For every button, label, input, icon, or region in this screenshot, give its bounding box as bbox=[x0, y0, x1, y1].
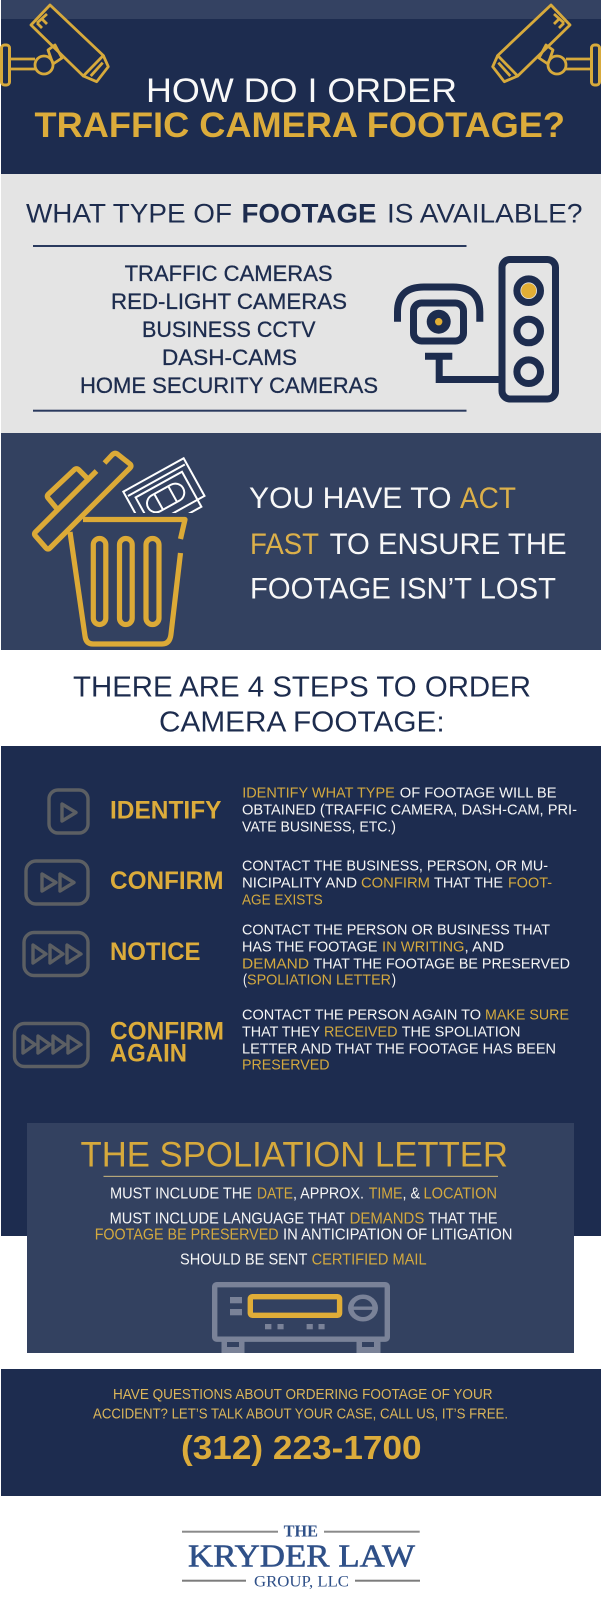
heading: four steps: THERE ARE 4 STEPS TO ORDER bbox=[73, 672, 531, 704]
panel: steps bbox=[1, 746, 601, 1236]
list of camera types bbox=[80, 261, 378, 398]
step description: confirm again: PRESERVED bbox=[242, 1056, 330, 1073]
list of camera types: HOME SECURITY CAMERAS bbox=[80, 373, 378, 398]
callout: act fast text bbox=[249, 482, 567, 606]
text: language that demands preservation: MUST INCLUDE LANGUAGE THAT bbox=[110, 1210, 345, 1227]
callout: act fast text: YOU HAVE TO bbox=[249, 482, 452, 515]
heading: the spoliation letter: THE SPOLIATION LETTER bbox=[80, 1136, 508, 1175]
panel: spoliation letter bbox=[27, 1123, 574, 1353]
icon: right security camera bbox=[493, 5, 600, 85]
text: date time location: MUST INCLUDE THE bbox=[110, 1185, 252, 1202]
step description: notice: ) bbox=[392, 971, 396, 988]
text: date time location: DATE bbox=[257, 1185, 293, 1202]
step description: identify: VATE BUSINESS, ETC.) bbox=[242, 818, 396, 835]
text: language that demands preservation: DEMANDS bbox=[350, 1210, 424, 1227]
panel: call to action footer bbox=[1, 1369, 601, 1496]
text: date time location: , APPROX. bbox=[293, 1185, 364, 1202]
text: date time location: TIME bbox=[369, 1185, 402, 1202]
step label: confirm: CONFIRM bbox=[110, 867, 224, 895]
step description: notice: SPOLIATION LETTER bbox=[247, 971, 391, 988]
step description: confirm: CONFIRM bbox=[361, 874, 430, 891]
title line two: TRAFFIC CAMERA FOOTAGE? bbox=[34, 106, 565, 145]
step description: confirm bbox=[242, 857, 552, 908]
step 4: confirm again bbox=[14, 1006, 569, 1073]
icon: trash can with video tape bbox=[34, 453, 208, 644]
heading: what type of footage bbox=[26, 199, 582, 229]
step label: identify: IDENTIFY bbox=[110, 796, 222, 824]
call to action text: ACCIDENT? LET’S TALK ABOUT YOUR CASE, CALL US, IT’S FREE. bbox=[93, 1405, 508, 1422]
logo: the kryder law group: GROUP, LLC bbox=[254, 1574, 349, 1591]
call to action text: HAVE QUESTIONS ABOUT ORDERING FOOTAGE OF YOUR bbox=[113, 1386, 493, 1403]
step label: confirm again: AGAIN bbox=[110, 1040, 187, 1068]
step description: confirm: AGE EXISTS bbox=[242, 891, 323, 908]
callout: act fast text: ACT bbox=[460, 482, 516, 515]
step label: confirm again bbox=[110, 1017, 224, 1068]
step description: confirm again: LETTER AND THAT THE FOOTAGE HAS BEEN bbox=[242, 1040, 556, 1057]
step description: notice: ( bbox=[243, 971, 247, 988]
heading: four steps: CAMERA FOOTAGE: bbox=[159, 707, 445, 739]
step label: notice: NOTICE bbox=[110, 938, 200, 966]
step description: notice: HAS THE FOOTAGE bbox=[242, 938, 378, 955]
text: date time location: , & bbox=[402, 1185, 421, 1202]
step description: confirm again bbox=[242, 1006, 569, 1073]
text: language that demands preservation bbox=[95, 1210, 512, 1243]
step description: confirm again: THE SPOLIATION bbox=[402, 1023, 520, 1040]
heading: what type of footage: FOOTAGE bbox=[242, 199, 376, 229]
callout: act fast text: FAST bbox=[250, 528, 319, 561]
phone number: (312) 223-1700 bbox=[181, 1429, 422, 1466]
text: certified mail: SHOULD BE SENT bbox=[180, 1251, 308, 1268]
list of camera types: DASH-CAMS bbox=[162, 345, 297, 370]
step description: notice bbox=[242, 921, 570, 988]
text: language that demands preservation: THAT THE bbox=[428, 1210, 498, 1227]
step 2: confirm bbox=[26, 857, 552, 908]
icon: quadruple play bbox=[14, 1024, 88, 1066]
step description: confirm again: RECEIVED bbox=[324, 1023, 398, 1040]
icon: single play bbox=[49, 790, 88, 833]
step description: notice: , AND bbox=[464, 938, 504, 955]
step description: confirm: THAT THE bbox=[434, 874, 503, 891]
panel: act fast bbox=[1, 433, 601, 650]
icon: double play bbox=[26, 861, 88, 904]
step 3: notice bbox=[24, 921, 570, 988]
icon: left security camera bbox=[2, 5, 108, 85]
step description: confirm: CONTACT THE BUSINESS, PERSON, OR MU- bbox=[242, 857, 548, 874]
step description: notice: THAT THE FOOTAGE BE PRESERVED bbox=[314, 955, 570, 972]
list of camera types: RED-LIGHT CAMERAS bbox=[111, 289, 347, 314]
step description: confirm: FOOT- bbox=[508, 874, 552, 891]
heading: four steps bbox=[73, 672, 531, 739]
logo: the kryder law group bbox=[182, 1522, 420, 1591]
step label: confirm again: CONFIRM bbox=[110, 1017, 224, 1045]
step description: notice: DEMAND bbox=[242, 955, 309, 972]
call to action text bbox=[93, 1386, 508, 1422]
icon: traffic light with camera bbox=[398, 260, 556, 399]
list of camera types: BUSINESS CCTV bbox=[142, 317, 316, 342]
callout: act fast text: FOOTAGE ISN’T LOST bbox=[250, 573, 556, 606]
logo: the kryder law group: KRYDER LAW bbox=[188, 1538, 416, 1574]
text: date time location bbox=[110, 1185, 497, 1202]
step description: notice: IN WRITING bbox=[382, 938, 464, 955]
step description: identify bbox=[242, 784, 577, 835]
heading: what type of footage: IS AVAILABLE? bbox=[387, 199, 582, 229]
logo: the kryder law group: THE bbox=[284, 1522, 318, 1541]
list of camera types: TRAFFIC CAMERAS bbox=[125, 261, 333, 286]
title line one: HOW DO I ORDER bbox=[146, 72, 457, 110]
step description: confirm again: CONTACT THE PERSON AGAIN TO bbox=[242, 1006, 481, 1023]
step description: notice: CONTACT THE PERSON OR BUSINESS THAT bbox=[242, 921, 550, 938]
text: language that demands preservation: IN ANTICIPATION OF LITIGATION bbox=[283, 1226, 512, 1243]
step description: confirm again: MAKE SURE bbox=[485, 1006, 569, 1023]
heading: what type of footage: WHAT TYPE OF bbox=[26, 199, 232, 229]
step description: confirm again: THAT THEY bbox=[242, 1023, 320, 1040]
step description: identify: OBTAINED (TRAFFIC CAMERA, DASH-CAM, PRI- bbox=[242, 801, 577, 818]
step description: confirm: NICIPALITY AND bbox=[242, 874, 357, 891]
panel: what type of footage bbox=[1, 174, 601, 433]
text: language that demands preservation: FOOTAGE BE PRESERVED bbox=[95, 1226, 279, 1243]
text: certified mail bbox=[180, 1251, 427, 1268]
icon: video recorder bbox=[215, 1285, 387, 1353]
panel: header bbox=[1, 0, 601, 174]
step description: identify: IDENTIFY WHAT TYPE bbox=[242, 784, 395, 801]
step 1: identify bbox=[49, 784, 577, 835]
step description: identify: OF FOOTAGE WILL BE bbox=[400, 784, 556, 801]
text: certified mail: CERTIFIED MAIL bbox=[312, 1251, 427, 1268]
icon: triple play bbox=[24, 932, 88, 976]
callout: act fast text: TO ENSURE THE bbox=[330, 528, 567, 561]
text: date time location: LOCATION bbox=[424, 1185, 497, 1202]
